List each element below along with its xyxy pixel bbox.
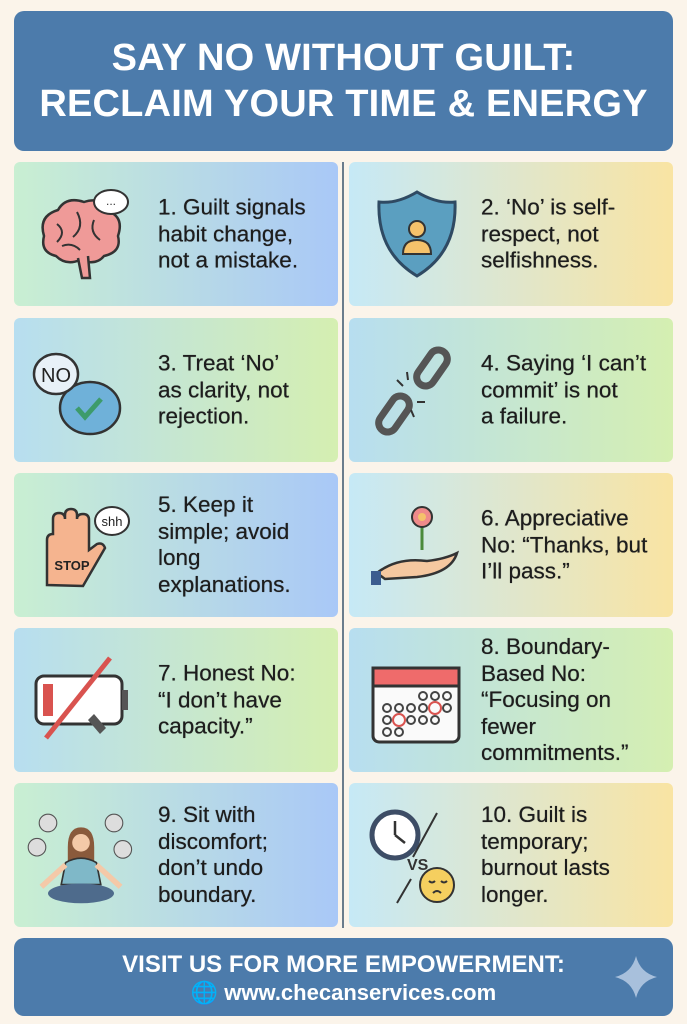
panel: 3: as clarity, not bbox=[158, 377, 289, 402]
title: SAY NO WITHOUT GUILT: bbox=[112, 37, 575, 79]
icon: clock vs tired face bbox=[370, 810, 455, 904]
panel: 6: 6. Appreciative bbox=[481, 505, 629, 530]
panel: 9 bbox=[14, 783, 338, 927]
panel: 8: commitments.” bbox=[481, 740, 629, 765]
panel: 7: 7. Honest No: bbox=[158, 660, 296, 685]
panel: 10: 10. Guilt is bbox=[481, 802, 587, 827]
panel: 3 bbox=[14, 318, 338, 462]
icon: brain: ... bbox=[106, 194, 116, 208]
icon: hand with flower bbox=[371, 506, 459, 585]
panel: 9: 9. Sit with bbox=[158, 802, 256, 827]
panel: 6: I’ll pass.” bbox=[481, 558, 570, 583]
panel: 8: “Focusing on bbox=[481, 687, 611, 712]
panel: 9: don’t undo bbox=[158, 855, 263, 880]
panel: 4: commit’ is not bbox=[481, 377, 618, 402]
icon: stop hand bbox=[46, 506, 130, 588]
panel: 10: burnout lasts bbox=[481, 855, 610, 880]
panel: 7: “I don’t have bbox=[158, 687, 282, 712]
panel: 5: explanations. bbox=[158, 572, 291, 596]
panel: 1: 1. Guilt signals bbox=[158, 194, 306, 219]
panel: 2: 2. ‘No’ is self- bbox=[481, 194, 615, 219]
icon: clock vs tired face: VS bbox=[407, 857, 429, 874]
icon: calendar bbox=[372, 666, 460, 744]
panel: 7 bbox=[14, 628, 338, 772]
panel: 4: a failure. bbox=[481, 403, 567, 428]
icon: stop hand: shh bbox=[102, 514, 122, 529]
panel: 8: Based No: bbox=[481, 660, 586, 685]
icon: shield bbox=[377, 190, 457, 278]
panel: 10 bbox=[349, 783, 673, 927]
panel: 8: fewer bbox=[481, 713, 536, 738]
icon: broken chain bbox=[375, 346, 451, 436]
panel: 2: selfishness. bbox=[481, 247, 599, 272]
title: RECLAIM YOUR TIME & ENERGY bbox=[39, 83, 648, 125]
panel: 3: 3. Treat ‘No’ bbox=[158, 350, 279, 375]
panel: 5: simple; avoid bbox=[158, 518, 289, 544]
panel: 7: capacity.” bbox=[158, 713, 253, 738]
footer bbox=[14, 938, 673, 1016]
panel: 10: temporary; bbox=[481, 828, 589, 854]
panel: 9: discomfort; bbox=[158, 828, 268, 854]
panel: 1: not a mistake. bbox=[158, 247, 298, 272]
icon: speech bubbles bbox=[32, 352, 122, 436]
panel: 2 bbox=[349, 162, 673, 306]
panel: 1 bbox=[14, 162, 338, 306]
icon: battery bbox=[34, 656, 128, 740]
panel: 3: rejection. bbox=[158, 403, 249, 428]
panel: 4 bbox=[349, 318, 673, 462]
panel: 4: 4. Saying ‘I can’t bbox=[481, 350, 646, 375]
footer text: VISIT US FOR MORE EMPOWERMENT: bbox=[122, 951, 565, 978]
title bbox=[14, 11, 673, 151]
panel: 5: long bbox=[158, 545, 201, 570]
panel: 9: boundary. bbox=[158, 882, 256, 906]
panel: 6: No: “Thanks, but bbox=[481, 532, 647, 557]
footer text: 🌐 www.checanservices.com bbox=[191, 980, 496, 1005]
panel: 1: habit change, bbox=[158, 221, 293, 246]
panel: 6 bbox=[349, 473, 673, 617]
icon: sparkle bbox=[615, 956, 657, 998]
panel: 8 bbox=[349, 628, 673, 772]
footer text bbox=[122, 951, 565, 1005]
panel: 5 bbox=[14, 473, 338, 617]
panel: 8: 8. Boundary- bbox=[481, 634, 610, 659]
icon: meditating person bbox=[28, 814, 132, 904]
panel: 2: respect, not bbox=[481, 221, 599, 246]
icon: speech bubbles: NO bbox=[41, 365, 71, 387]
icon: brain bbox=[41, 189, 129, 280]
panel: 10: longer. bbox=[481, 882, 549, 906]
icon: stop hand: STOP bbox=[54, 558, 90, 573]
panel: 5: 5. Keep it bbox=[158, 492, 253, 517]
